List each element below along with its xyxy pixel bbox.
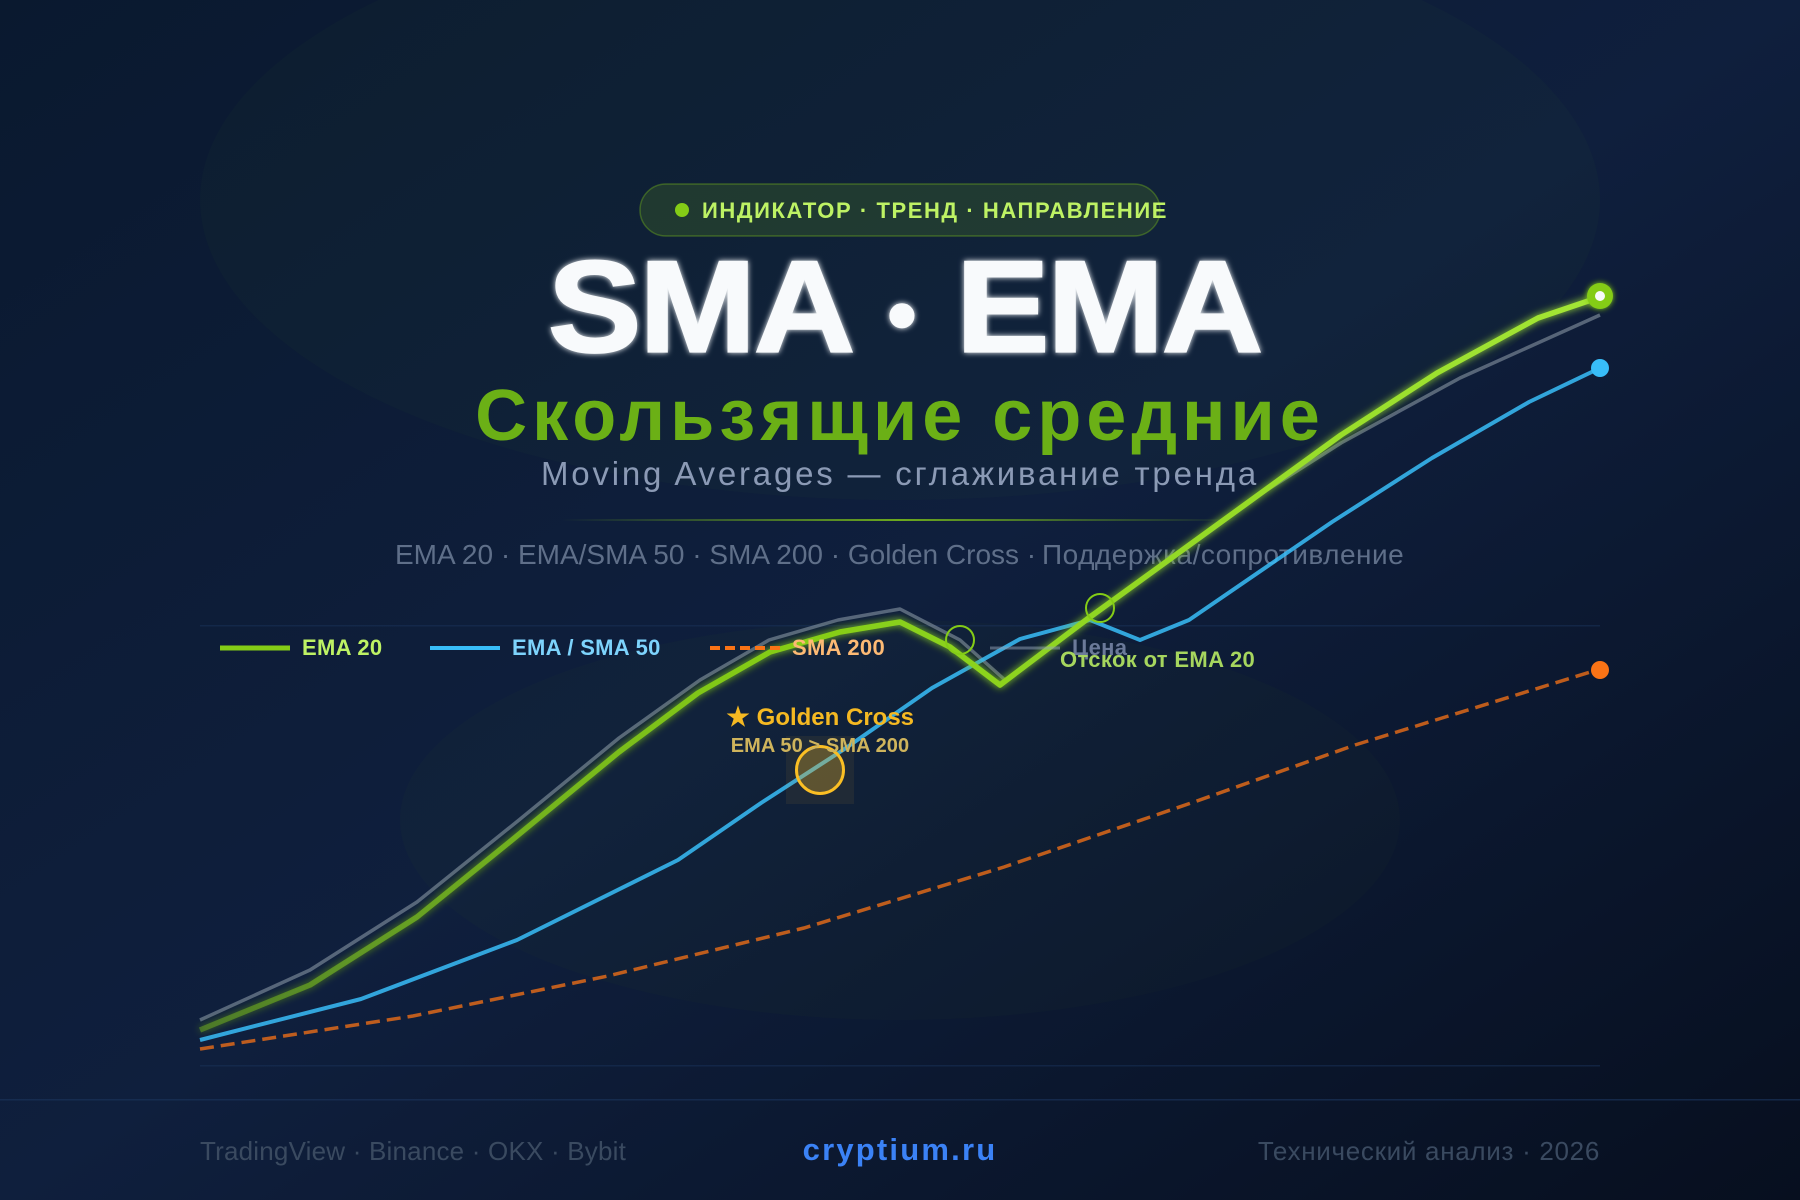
marker: bounce 2 xyxy=(1086,594,1114,622)
title: SMA xyxy=(548,234,853,379)
topics line: EMA 20 · EMA/SMA 50 · SMA 200 · Golden Cross · xyxy=(395,539,1036,570)
line: EMA / SMA 50 xyxy=(200,368,1600,1040)
marker: bounce 1 xyxy=(946,626,974,654)
background ellipse: bottom xyxy=(400,620,1400,1020)
header block xyxy=(395,184,1404,570)
legend: EMA 20 xyxy=(220,635,382,660)
line: price xyxy=(200,315,1600,1020)
legend xyxy=(220,635,1128,660)
footer: site: cryptium.ru xyxy=(803,1132,997,1167)
legend: EMA / SMA 50 xyxy=(430,635,661,660)
title xyxy=(548,229,1261,401)
title: · xyxy=(876,229,928,401)
annotation: golden cross xyxy=(726,704,914,757)
legend: SMA 200: SMA 200 xyxy=(792,635,885,660)
end dot: SMA 200 xyxy=(1591,661,1609,679)
chart xyxy=(200,283,1613,1066)
legend: EMA / SMA 50: EMA / SMA 50 xyxy=(512,635,661,660)
footer xyxy=(0,1099,1800,1167)
english subtitle: Moving Averages — сглаживание тренда xyxy=(541,455,1259,492)
title: EMA xyxy=(956,234,1261,379)
legend: price xyxy=(990,635,1128,660)
badge pill: ИНДИКАТОР · ТРЕНД · НАПРАВЛЕНИЕ xyxy=(702,198,1168,223)
footer: platforms: TradingView · Binance · OKX · Bybit xyxy=(200,1136,627,1166)
footer: note: Технический анализ · 2026 xyxy=(1258,1136,1600,1166)
annotation: bounce from EMA 20: Отскок от EMA 20 xyxy=(1060,647,1255,672)
legend: EMA 20: EMA 20 xyxy=(302,635,382,660)
subtitle: Скользящие средние xyxy=(475,376,1325,456)
background ellipse: top xyxy=(200,0,1600,500)
annotation: golden cross: ★ Golden Cross xyxy=(726,704,914,731)
badge pill xyxy=(640,184,1168,236)
annotation: golden cross: EMA 50 > SMA 200 xyxy=(731,735,909,757)
line: SMA 200 xyxy=(200,669,1600,1049)
topics line: Поддержка/сопротивление xyxy=(1042,539,1404,570)
divider xyxy=(560,519,1240,521)
line: EMA 20 xyxy=(200,297,1600,1030)
end dot: EMA 20 xyxy=(1587,283,1613,309)
legend: price: Цена xyxy=(1072,635,1128,660)
marker: golden cross xyxy=(786,736,854,804)
end dot: EMA 50 xyxy=(1591,359,1609,377)
